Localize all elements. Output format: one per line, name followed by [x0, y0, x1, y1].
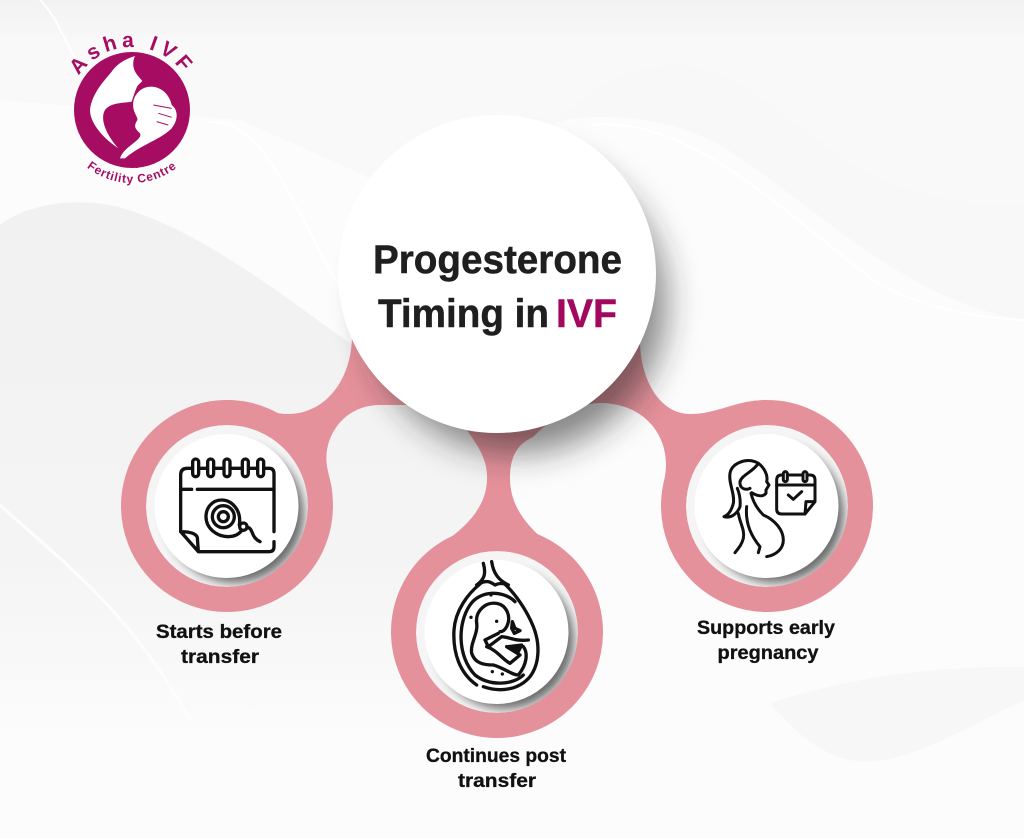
label: starts before transfer: transfer — [181, 647, 260, 668]
ring: left — [121, 400, 333, 612]
pink connector network — [121, 300, 873, 738]
title: IVF — [556, 292, 617, 336]
central circle shadow — [366, 153, 666, 453]
logo name: Asha IVF — [72, 36, 193, 76]
logo — [72, 36, 193, 186]
label: supports early pregnancy — [697, 618, 835, 664]
ring: centre — [391, 526, 603, 738]
icon: calendar with egg and sperm — [181, 459, 274, 552]
label: continues post transfer: Continues post — [426, 746, 567, 767]
logo mother and baby — [90, 56, 177, 158]
label: starts before transfer — [156, 622, 282, 668]
icon: fetus in womb — [454, 562, 538, 690]
logo ampersand: & — [128, 155, 138, 171]
disc: centre — [416, 551, 578, 713]
title: Timing in — [378, 292, 549, 336]
central circle — [338, 115, 656, 433]
title — [373, 238, 622, 336]
connectors — [227, 300, 767, 630]
label: supports early pregnancy: pregnancy — [718, 643, 819, 664]
logo subtitle: Fertility Centre — [87, 161, 176, 186]
title: Progesterone — [373, 238, 622, 282]
label: continues post transfer — [426, 746, 567, 792]
disc: right — [686, 425, 848, 587]
label: starts before transfer: Starts before — [156, 622, 282, 643]
disc: left — [146, 425, 308, 587]
logo disc — [74, 52, 190, 168]
ring: right — [661, 400, 873, 612]
icon: pregnant woman with calendar — [724, 461, 815, 557]
label: continues post transfer: transfer — [458, 771, 537, 792]
label: supports early pregnancy: Supports early — [697, 618, 835, 639]
